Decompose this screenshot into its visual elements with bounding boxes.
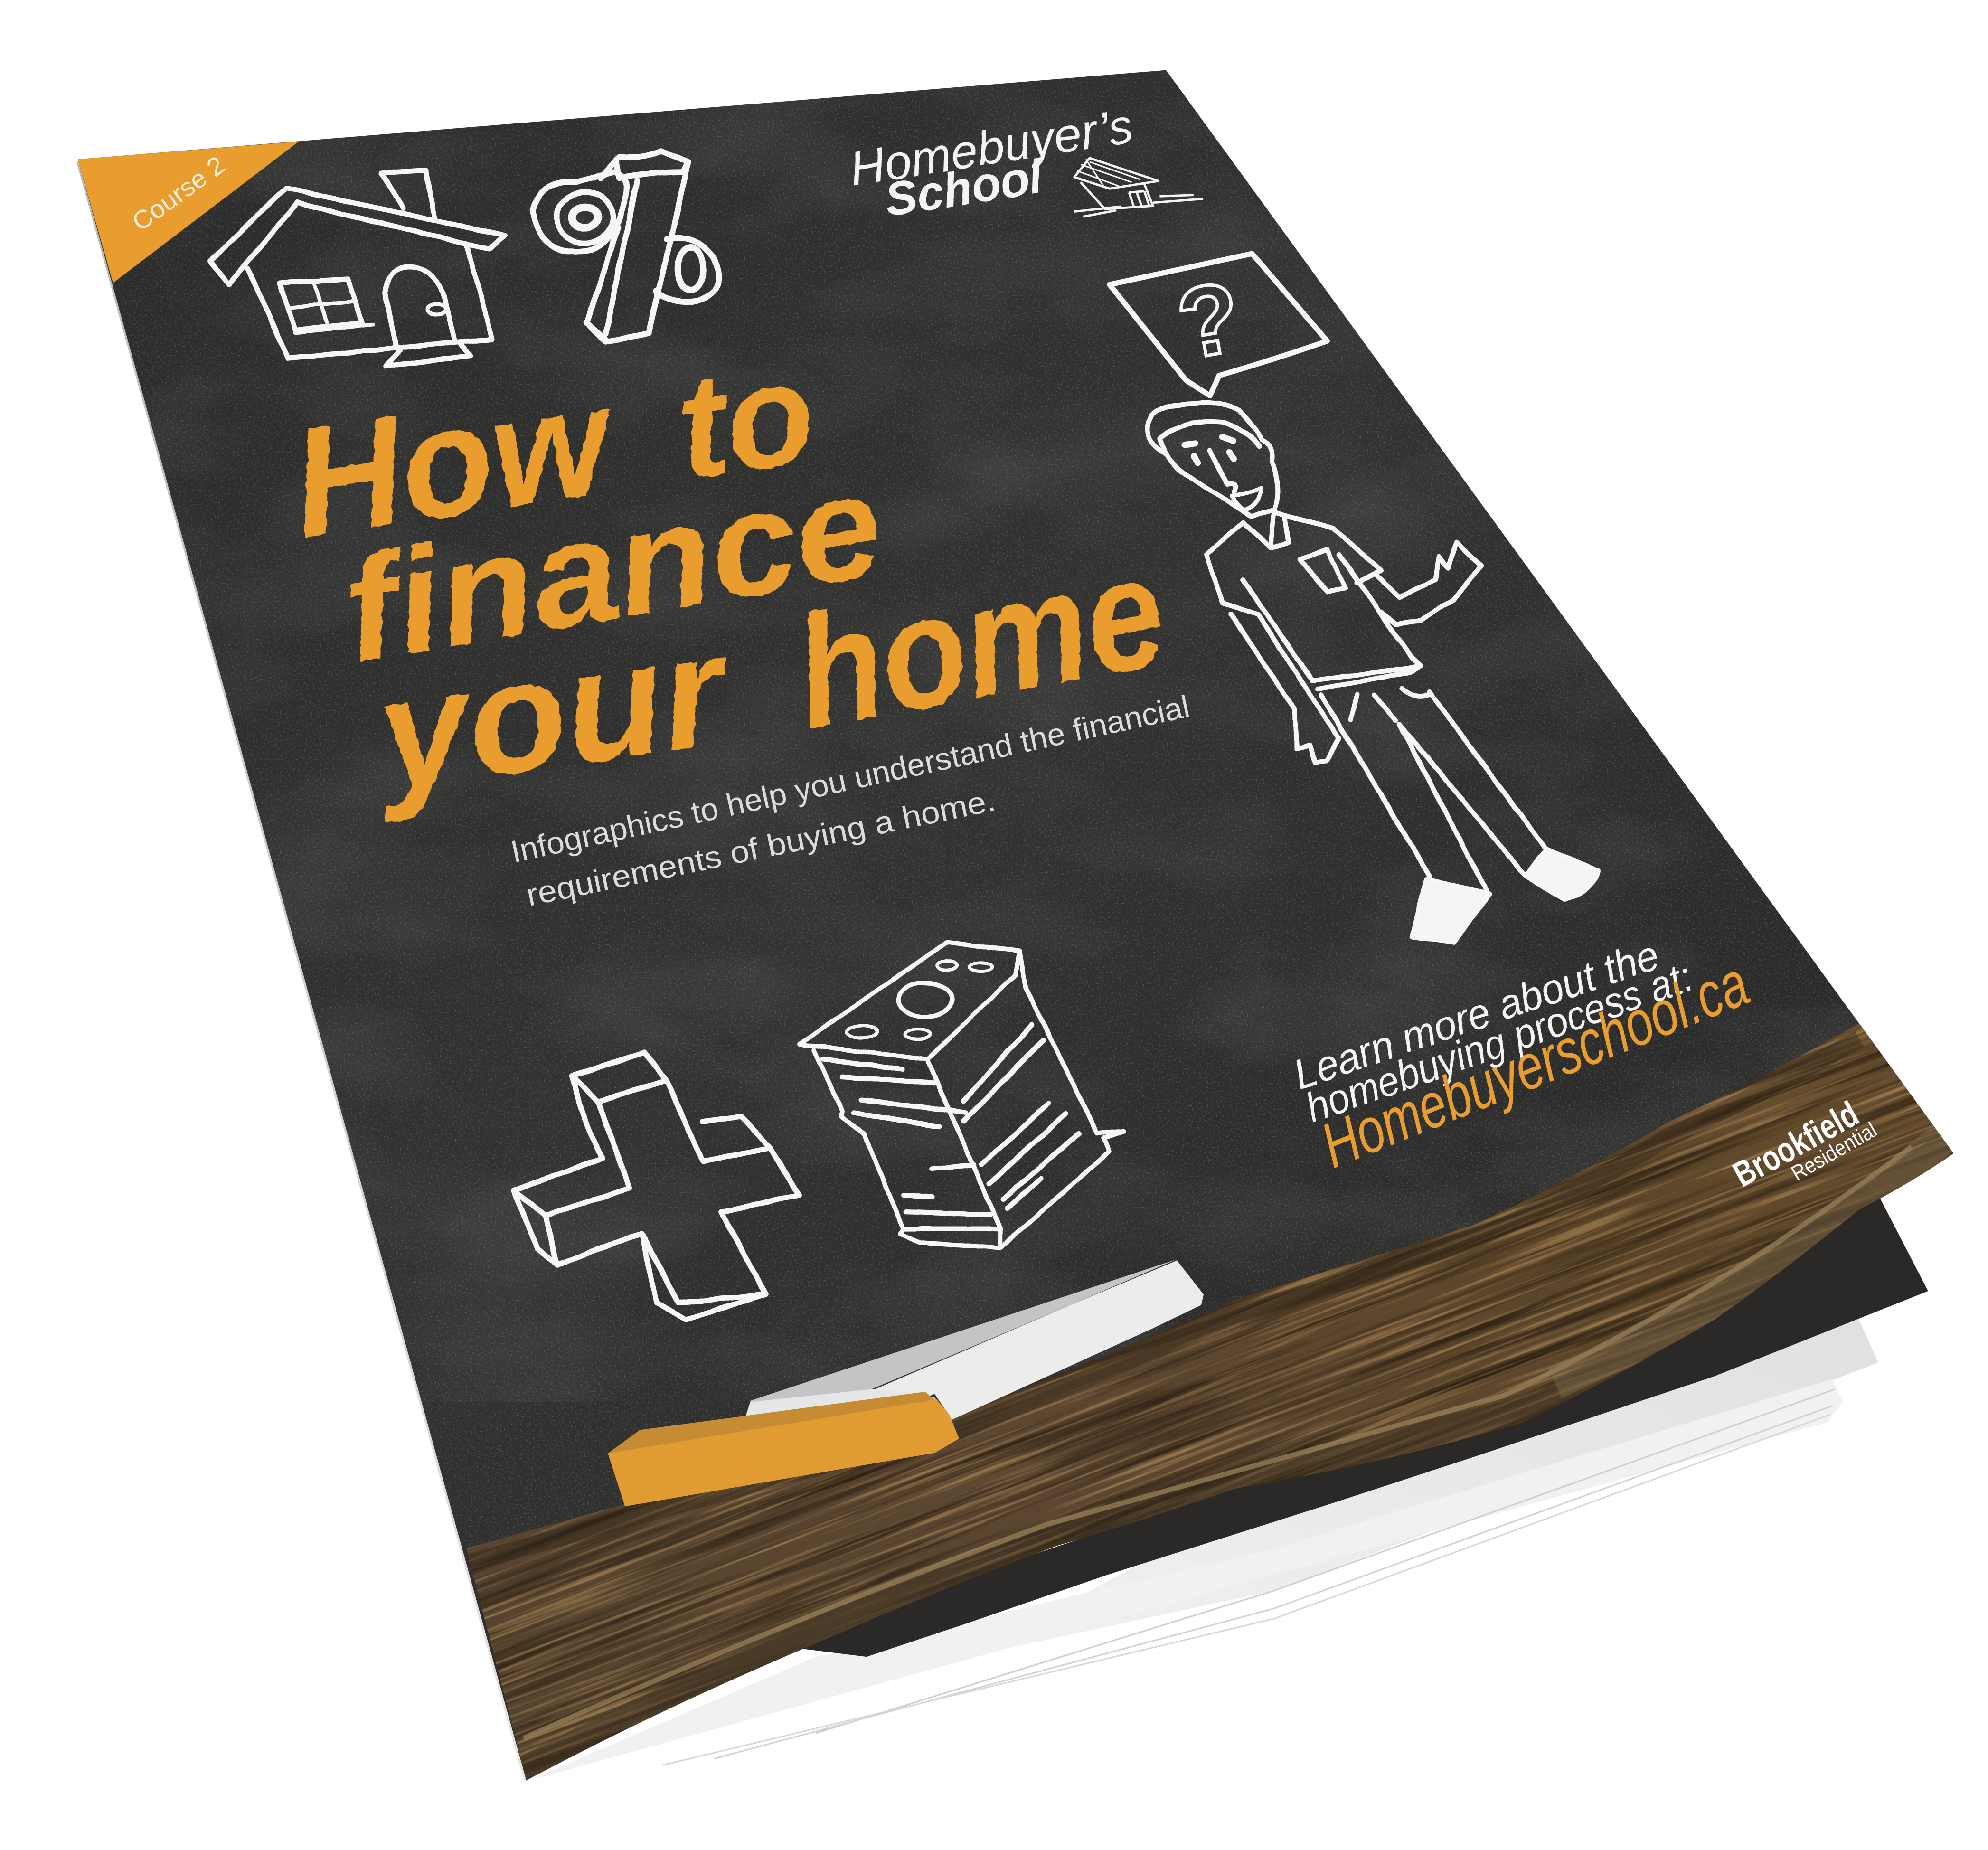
icon: house sketch [210, 170, 505, 367]
white chalk stick [744, 1259, 1204, 1422]
subtitle: Infographics to help you understand the financial [508, 689, 1193, 869]
man shoes [1412, 849, 1598, 943]
man arms and hands [1231, 542, 1481, 762]
man head [1148, 402, 1278, 516]
logo house [1074, 158, 1203, 217]
logo: Homebuyer's School [846, 98, 1203, 227]
logo wordmark: Homebuyer’s [846, 98, 1136, 197]
title [282, 330, 1178, 826]
Brookfield Residential logo: Brookfield [1726, 1094, 1865, 1194]
call to action text: homebuying process at: [1300, 953, 1698, 1131]
title: finance [332, 440, 894, 694]
title: your [360, 598, 743, 826]
logo wordmark: School [881, 149, 1047, 227]
spine edge [76, 162, 530, 1780]
man character sketch [1148, 402, 1598, 943]
title: to [667, 330, 824, 510]
call to action text: Learn more about the [1288, 931, 1665, 1098]
icon: plus sign sketch [514, 1053, 799, 1320]
man trousers [1321, 688, 1547, 890]
icon: speech bubble with question mark [1110, 254, 1327, 396]
back pages stack [529, 1315, 1878, 1780]
icon: speech bubble with question mark: ? [1169, 261, 1249, 380]
wood ledge [172, 679, 1988, 1850]
title: How [282, 351, 629, 571]
Brookfield Residential logo: Residential [1787, 1117, 1881, 1186]
website url: Homebuyerschool.ca [1312, 948, 1758, 1181]
title: home [782, 521, 1178, 763]
back cover [764, 1185, 1928, 1657]
corner tab: course 2: Course 2 [127, 151, 230, 236]
orange chalk stick [608, 1392, 959, 1506]
subtitle: requirements of buying a home. [523, 782, 999, 913]
man shirt [1207, 510, 1421, 689]
icon: percent sign sketch [533, 151, 719, 342]
corner tab: course 2 [78, 142, 299, 283]
icon: stack of money sketch [799, 943, 1124, 1248]
